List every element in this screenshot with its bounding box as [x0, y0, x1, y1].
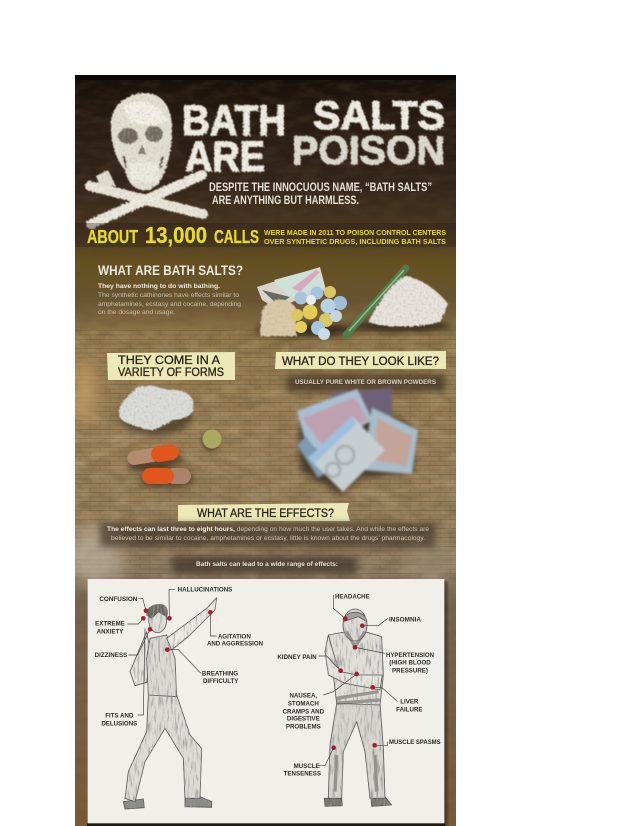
illustration: crystal salt rock: [119, 386, 193, 435]
heading: what do they look like: [275, 351, 446, 369]
infographic canvas: [75, 75, 456, 826]
callout: 13,000 calls: CALLS: [214, 227, 259, 247]
symptom labels: HEADACHE: [335, 593, 370, 600]
symptom labels: [95, 587, 441, 778]
symptom labels: AGITATION: [218, 633, 251, 640]
figure: man clutching stomach: [324, 609, 392, 806]
background: brick wall panel: [69, 75, 456, 826]
symptom labels: FAILURE: [396, 706, 423, 713]
symptom labels: STOMACH: [288, 701, 319, 708]
heading: what do they look like: WHAT DO THEY LOOK LIKE?: [282, 356, 439, 368]
symptom labels: CRAMPS AND: [283, 708, 325, 715]
text block: what are bath salts: [98, 263, 243, 316]
subtitle: ARE ANYTHING BUT HARMLESS.: [212, 193, 359, 207]
symptom labels: PROBLEMS: [286, 724, 321, 731]
symptom labels: TENSENESS: [284, 771, 321, 778]
callout: 13,000 calls: [75, 222, 456, 248]
callout: 13,000 calls: 13,000: [145, 222, 207, 248]
symptom labels: HALLUCINATIONS: [178, 587, 232, 594]
symptom labels: LIVER: [400, 699, 419, 706]
text block: what are bath salts: They have nothing to do with bathing.: [98, 283, 220, 290]
title: BATH: [182, 97, 286, 145]
panel: effects diagram on paper: [87, 579, 448, 826]
heading: they come in a variety of forms: [107, 352, 235, 380]
symptom labels: AND AGGRESSION: [207, 641, 264, 648]
caption: usually pure white or brown powders: USUALLY PURE WHITE OR BROWN POWDERS: [295, 379, 437, 386]
title: POISON: [292, 129, 445, 173]
heading: they come in a variety of forms: VARIETY OF FORMS: [118, 367, 224, 379]
caption: wide range of effects: [172, 556, 357, 574]
figure: agitated man: [123, 598, 217, 809]
symptom labels: FITS AND: [105, 713, 134, 720]
symptom labels: INSOMNIA: [389, 616, 422, 623]
title: ARE: [185, 133, 265, 181]
callout: 13,000 calls: OVER SYNTHETIC DRUGS, INCLUDING BATH SALTS: [264, 237, 446, 246]
illustration: drug packets, pills and powder: [255, 267, 450, 340]
title: SALTS: [313, 94, 445, 138]
symptom labels: PRESSURE): [392, 667, 428, 674]
illustration: orange capsules: [126, 443, 194, 488]
symptom labels: DIFFICULTY: [203, 678, 238, 685]
text block: effects duration: believed to be similar to cocaine, amphetamines or ecstasy, little is known about the drugs’ pharmacology.: [111, 535, 425, 542]
symptom labels: DIZZINESS: [95, 652, 127, 659]
symptom labels: MUSCLE: [294, 763, 320, 770]
text block: what are bath salts: amphetamines, ecstasy and cocaine, depending: [98, 301, 241, 308]
heading: what are the effects: [178, 503, 350, 521]
leader lines: [127, 589, 398, 766]
text block: effects duration: The effects can last three to eight hours, depending on how much the user takes. And while the effects are: [107, 526, 429, 533]
symptom markers: [141, 608, 377, 750]
text block: what are bath salts: WHAT ARE BATH SALTS?: [98, 263, 243, 278]
illustration: powder skull and crossbones: [90, 93, 203, 224]
symptom labels: MUSCLE SPASMS: [389, 739, 441, 746]
symptom labels: DIGESTIVE: [287, 716, 320, 723]
title: [182, 94, 445, 181]
illustration: plastic bags of powder: [297, 388, 418, 494]
illustration: green pill: [201, 430, 222, 451]
symptom labels: NAUSEA,: [289, 693, 317, 700]
caption: wide range of effects: Bath salts can lead to a wide range of effects:: [196, 561, 338, 568]
callout: 13,000 calls: ABOUT: [87, 227, 138, 247]
symptom labels: DELUSIONS: [101, 720, 137, 727]
symptom labels: (HIGH BLOOD: [389, 659, 431, 666]
subtitle: [209, 180, 432, 207]
symptom labels: CONFUSION: [99, 596, 138, 603]
text block: effects duration: [100, 523, 435, 547]
symptom labels: BREATHING: [202, 671, 238, 678]
heading: they come in a variety of forms: THEY COME IN A: [118, 355, 220, 367]
text block: what are bath salts: on the dosage and usage.: [98, 309, 175, 316]
subtitle: DESPITE THE INNOCUOUS NAME, “BATH SALTS”: [209, 180, 432, 194]
caption: usually pure white or brown powders: [287, 374, 445, 392]
symptom labels: ANXIETY: [97, 628, 123, 635]
heading: what are the effects: WHAT ARE THE EFFECTS?: [197, 508, 334, 520]
symptom labels: HYPERTENSION: [386, 652, 435, 659]
callout: 13,000 calls: WERE MADE IN 2011 TO POISON CONTROL CENTERS: [264, 228, 446, 237]
text block: what are bath salts: The synthetic cathinones have effects similar to: [98, 292, 239, 299]
symptom labels: EXTREME: [95, 620, 125, 627]
symptom labels: KIDNEY PAIN: [277, 654, 317, 661]
